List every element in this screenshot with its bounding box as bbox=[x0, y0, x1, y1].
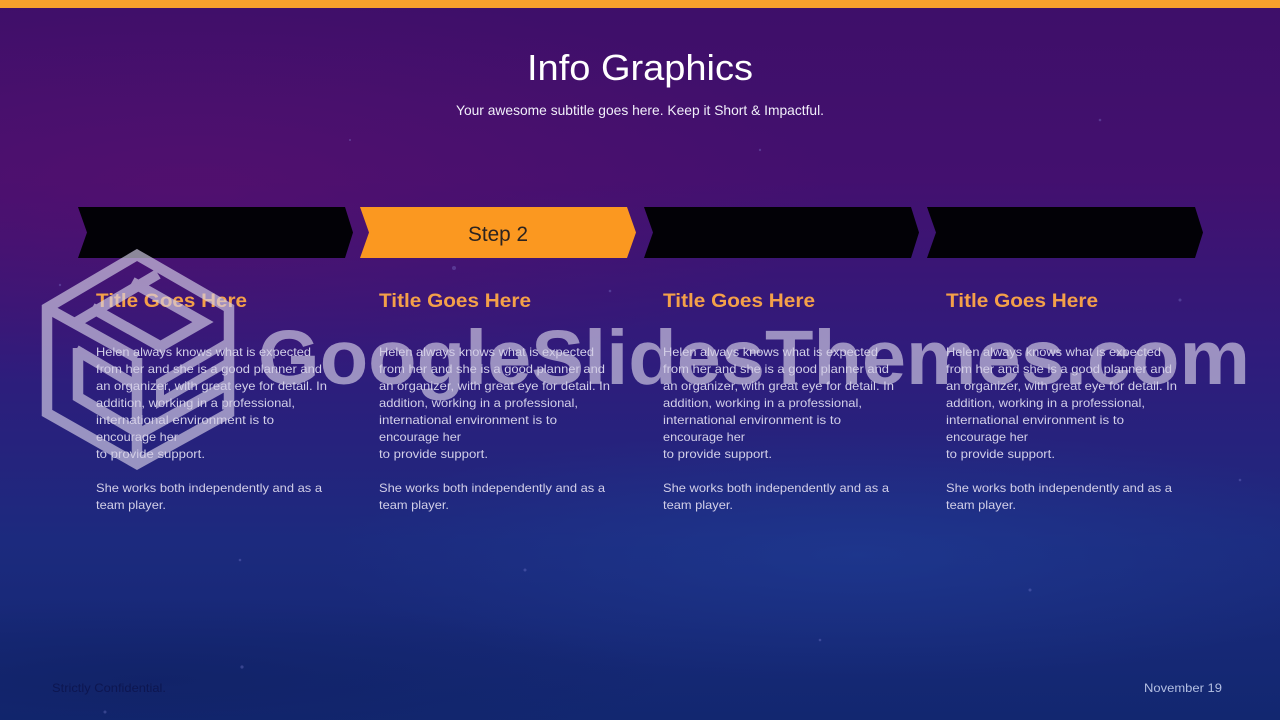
column 1 bbox=[96, 290, 327, 512]
column 4 heading: Title Goes Here bbox=[946, 290, 1098, 312]
column 1 body text: international environment is to bbox=[96, 413, 274, 427]
column 1 body text: team player. bbox=[96, 498, 166, 512]
column 2 body text: team player. bbox=[379, 498, 449, 512]
column 1 body text: Helen always knows what is expected bbox=[96, 345, 311, 359]
column 1 body text: addition, working in a professional, bbox=[96, 396, 295, 410]
title: Info Graphics bbox=[527, 47, 753, 88]
column 3 body text bbox=[663, 345, 894, 512]
chevron: step 2: Step 2 bbox=[468, 223, 528, 246]
chevron: step 4 bbox=[927, 207, 1203, 258]
footer: confidentiality note: Strictly Confidential. bbox=[52, 681, 166, 695]
column 2 body text: from her and she is a good planner and bbox=[379, 362, 605, 376]
chevron: step 3 bbox=[644, 207, 919, 258]
column 2 body text: addition, working in a professional, bbox=[379, 396, 578, 410]
column 2 body text bbox=[379, 345, 610, 512]
column 1 body text: an organizer, with great eye for detail. In bbox=[96, 379, 327, 393]
top accent bar bbox=[0, 0, 1280, 8]
column 2 heading: Title Goes Here bbox=[379, 290, 531, 312]
column 3 body text: from her and she is a good planner and bbox=[663, 362, 889, 376]
column 4 body text: international environment is to bbox=[946, 413, 1124, 427]
column 3 bbox=[663, 290, 894, 512]
column 4 body text: addition, working in a professional, bbox=[946, 396, 1145, 410]
column 2 body text: Helen always knows what is expected bbox=[379, 345, 594, 359]
column 1 body text: She works both independently and as a bbox=[96, 481, 322, 495]
column 4 body text: team player. bbox=[946, 498, 1016, 512]
column 3 body text: team player. bbox=[663, 498, 733, 512]
column 4 body text: to provide support. bbox=[946, 447, 1055, 461]
column 2 body text: to provide support. bbox=[379, 447, 488, 461]
column 1 heading: Title Goes Here bbox=[96, 290, 247, 312]
column 2 body text: an organizer, with great eye for detail. In bbox=[379, 379, 610, 393]
column 1 body text bbox=[96, 345, 327, 512]
footer: date: November 19 bbox=[1144, 681, 1222, 695]
column 3 body text: international environment is to bbox=[663, 413, 841, 427]
column 4 body text: encourage her bbox=[946, 430, 1028, 444]
column 3 body text: encourage her bbox=[663, 430, 745, 444]
column 4 body text: from her and she is a good planner and bbox=[946, 362, 1172, 376]
column 4 body text: an organizer, with great eye for detail. In bbox=[946, 379, 1177, 393]
column 2 bbox=[379, 290, 610, 512]
column 3 body text: to provide support. bbox=[663, 447, 772, 461]
column 3 body text: Helen always knows what is expected bbox=[663, 345, 878, 359]
column 2 body text: encourage her bbox=[379, 430, 461, 444]
chevron: step 1 bbox=[78, 207, 353, 258]
column 4 body text bbox=[946, 345, 1177, 512]
step chevrons bbox=[78, 207, 1203, 258]
column 3 body text: addition, working in a professional, bbox=[663, 396, 862, 410]
chevron: step 2 bbox=[360, 207, 636, 258]
column 1 body text: encourage her bbox=[96, 430, 178, 444]
column 2 body text: She works both independently and as a bbox=[379, 481, 605, 495]
column 4 body text: Helen always knows what is expected bbox=[946, 345, 1161, 359]
watermark: box logo bbox=[47, 255, 232, 464]
column 1 body text: from her and she is a good planner and bbox=[96, 362, 322, 376]
column 3 body text: an organizer, with great eye for detail. In bbox=[663, 379, 894, 393]
column 3 body text: She works both independently and as a bbox=[663, 481, 889, 495]
subtitle: Your awesome subtitle goes here. Keep it Short & Impactful. bbox=[456, 102, 824, 118]
column 1 body text: to provide support. bbox=[96, 447, 205, 461]
watermark: site name: GoogleSlidesThemes.com bbox=[258, 315, 1250, 401]
column 4 body text: She works both independently and as a bbox=[946, 481, 1172, 495]
column 4 bbox=[946, 290, 1177, 512]
column 2 body text: international environment is to bbox=[379, 413, 557, 427]
column 3 heading: Title Goes Here bbox=[663, 290, 815, 312]
